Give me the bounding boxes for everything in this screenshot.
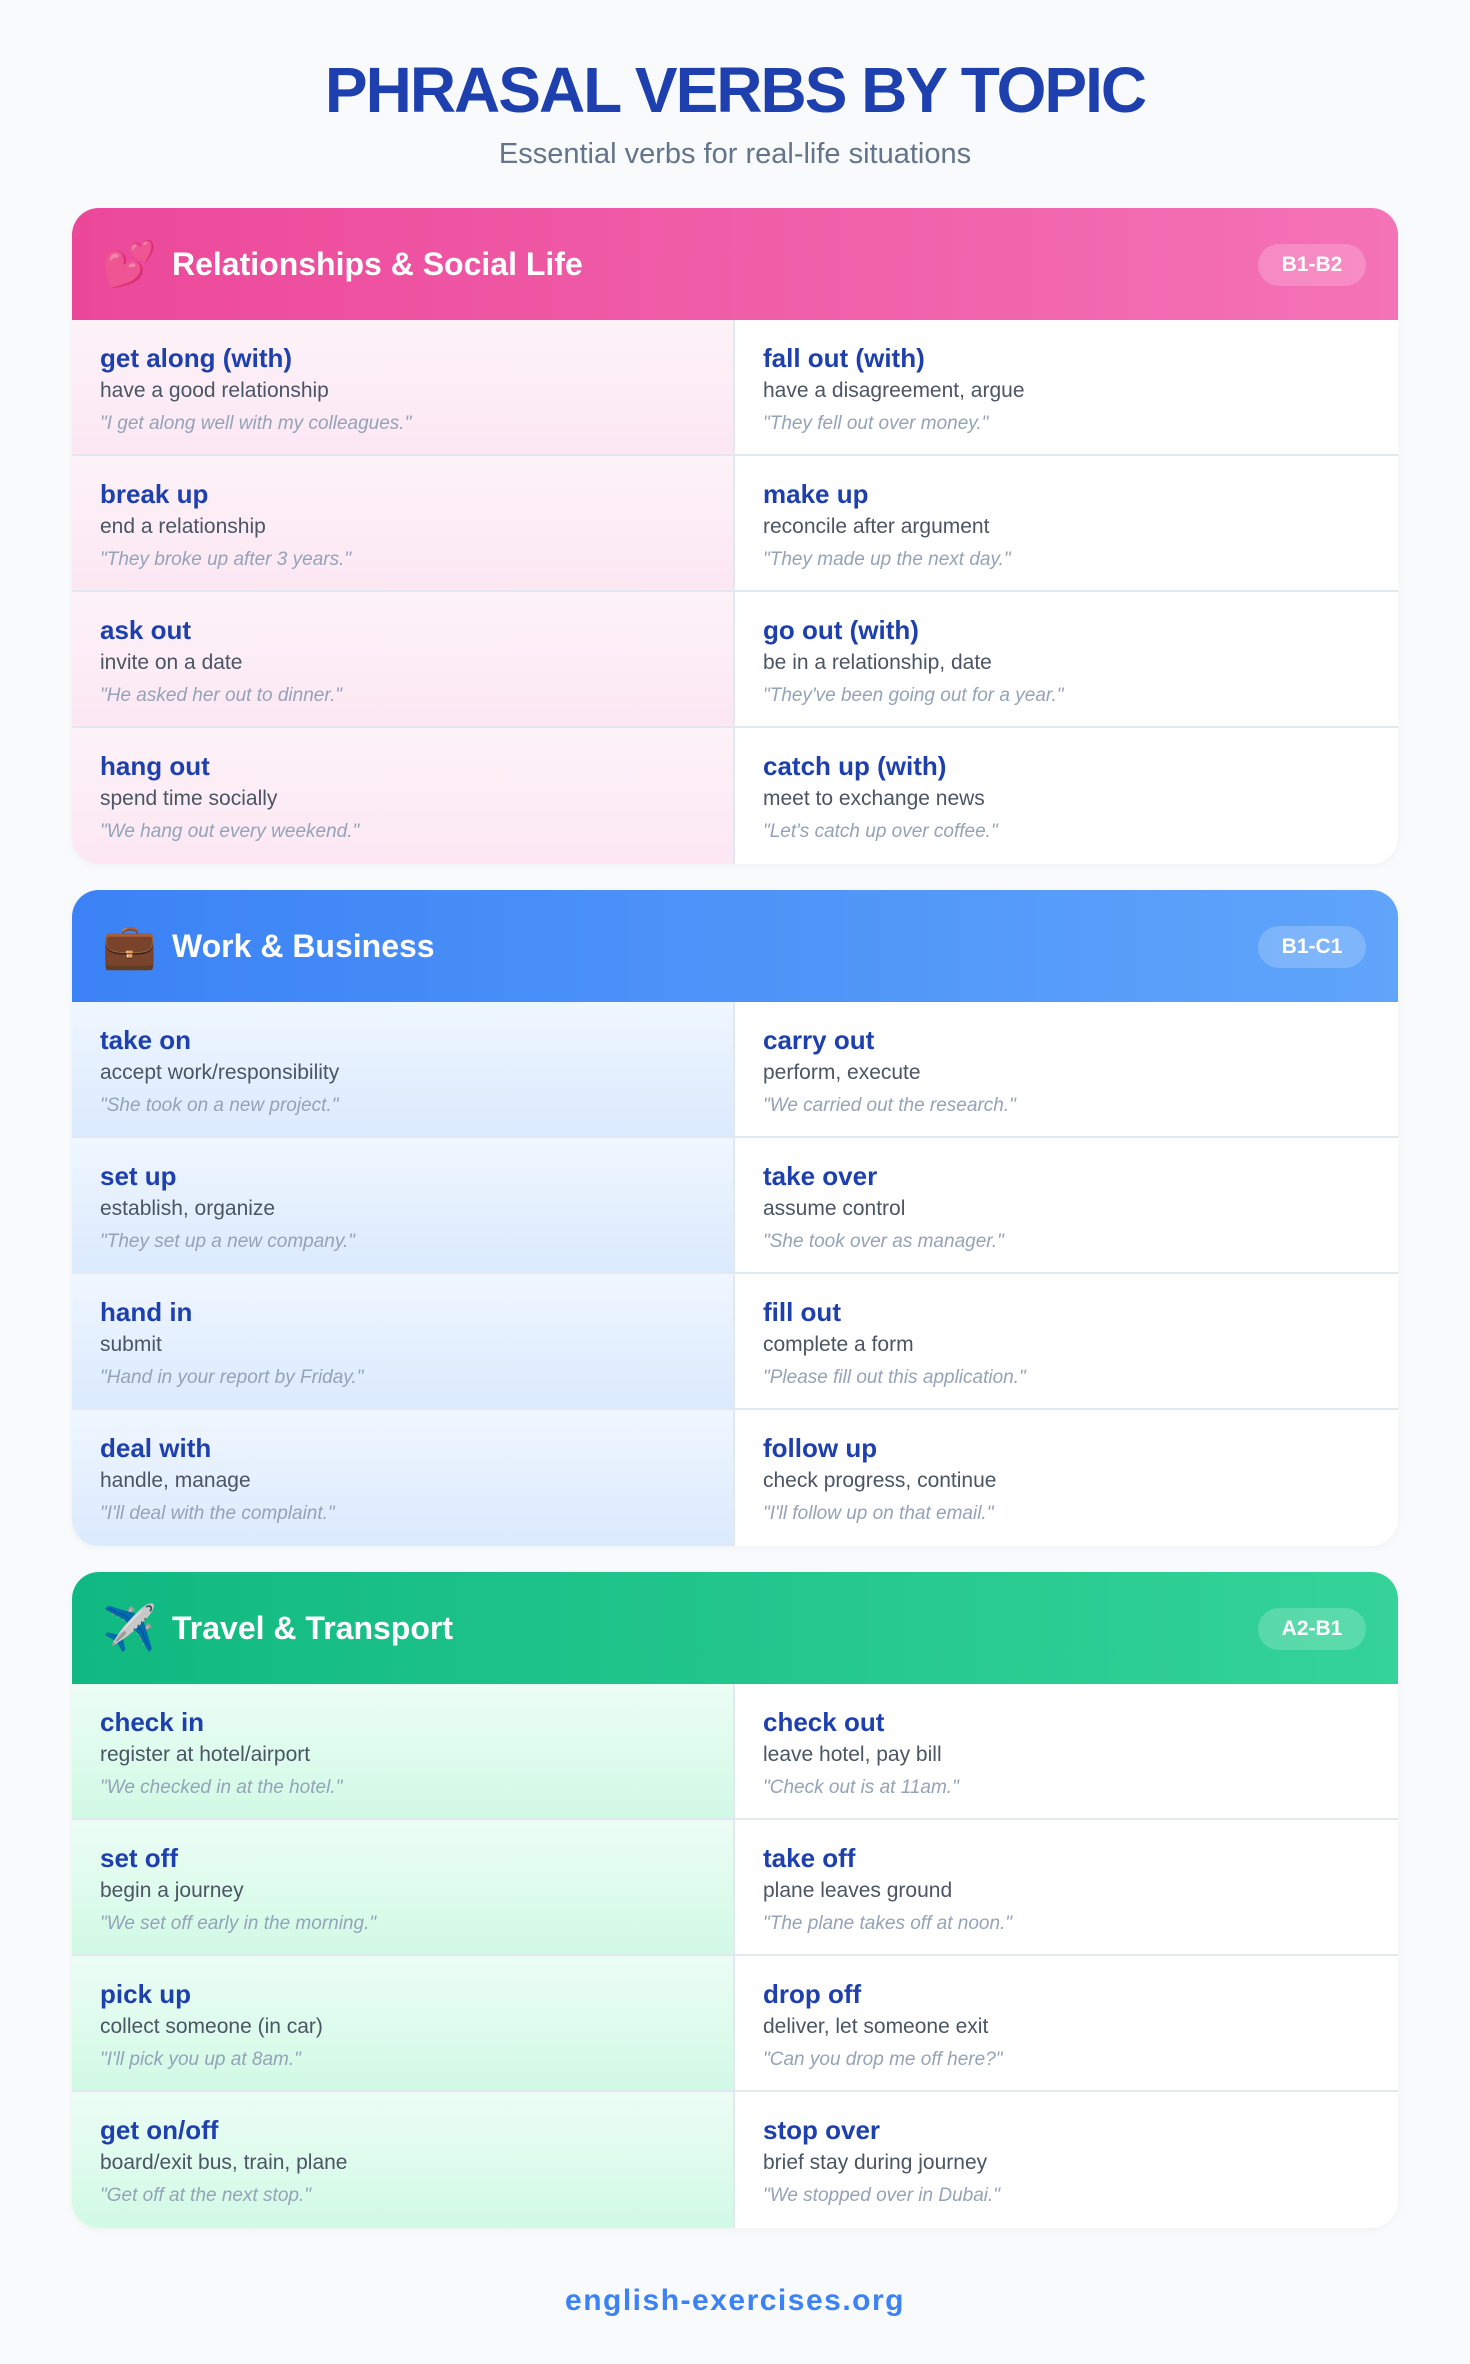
verb grid: travel: register at hotel/airport	[100, 1743, 310, 1766]
verb grid: relationships: fall out (with)	[763, 343, 925, 373]
footer: english-exercises.org	[565, 2284, 905, 2317]
subtitle: Essential verbs for real-life situations	[499, 138, 971, 170]
verb grid: relationships: be in a relationship, date	[763, 651, 992, 674]
verb grid: work: accept work/responsibility	[100, 1061, 339, 1084]
panel header: relationships: 💕	[102, 238, 157, 290]
verb grid: work: take over	[763, 1161, 877, 1191]
verb grid: relationships: spend time socially	[100, 787, 277, 810]
panel: travel	[72, 1572, 1398, 2228]
panel header: work	[72, 890, 1398, 1002]
verb grid: travel: "Get off at the next stop."	[100, 2185, 311, 2206]
verb grid: work: deal with	[100, 1433, 211, 1463]
verb grid: relationships: "They've been going out for a year."	[763, 685, 1064, 706]
verb grid: travel: "We checked in at the hotel."	[100, 1777, 342, 1798]
panel header: work: Work & Business	[172, 928, 435, 964]
verb grid: work: submit	[100, 1333, 162, 1356]
verb grid: travel: collect someone (in car)	[100, 2015, 323, 2038]
panel header: work: 💼	[102, 920, 157, 972]
verb grid: relationships: end a relationship	[100, 515, 266, 538]
verb grid: work: check progress, continue	[763, 1469, 996, 1492]
verb grid: relationships: "We hang out every weekend."	[100, 821, 359, 842]
verb grid: travel: brief stay during journey	[763, 2151, 987, 2174]
verb grid: relationships: "They made up the next day."	[763, 549, 1011, 570]
panel header: relationships	[72, 208, 1398, 320]
verb grid: travel: leave hotel, pay bill	[763, 1743, 942, 1766]
verb grid: travel: "Check out is at 11am."	[763, 1777, 959, 1798]
verb grid: work: fill out	[763, 1297, 841, 1327]
verb grid: travel: pick up	[100, 1979, 191, 2009]
panel header: travel: Travel & Transport	[172, 1610, 453, 1646]
verb grid: travel: deliver, let someone exit	[763, 2015, 988, 2038]
panel header: relationships: Relationships & Social Life	[172, 246, 583, 282]
verb grid: relationships: "I get along well with my colleagues."	[100, 413, 411, 434]
verb grid: travel: board/exit bus, train, plane	[100, 2151, 348, 2174]
verb grid: travel: check out	[763, 1707, 884, 1737]
verb grid: travel: stop over	[763, 2115, 880, 2145]
verb grid: relationships: have a disagreement, argue	[763, 379, 1025, 402]
verb grid: work: "She took over as manager."	[763, 1231, 1004, 1252]
panel header: travel	[72, 1572, 1398, 1684]
verb grid: relationships	[72, 320, 1398, 864]
verb grid: travel: plane leaves ground	[763, 1879, 952, 1902]
verb grid: work: take on	[100, 1025, 191, 1055]
verb grid: travel	[72, 1684, 1398, 2228]
verb grid: work	[72, 1002, 1398, 1546]
verb grid: work: "We carried out the research."	[763, 1095, 1016, 1116]
verb grid: work: perform, execute	[763, 1061, 921, 1084]
verb grid: work: "I'll follow up on that email."	[763, 1503, 993, 1524]
verb grid: travel: take off	[763, 1843, 855, 1873]
verb grid: relationships: invite on a date	[100, 651, 242, 674]
verb grid: travel: "Can you drop me off here?"	[763, 2049, 1003, 2070]
verb grid: work: complete a form	[763, 1333, 914, 1356]
verb grid: work: "I'll deal with the complaint."	[100, 1503, 335, 1524]
verb grid: travel: drop off	[763, 1979, 861, 2009]
verb grid: relationships: get along (with)	[100, 343, 292, 373]
verb grid: work: hand in	[100, 1297, 192, 1327]
title: PHRASAL VERBS BY TOPIC	[325, 54, 1145, 126]
verb grid: work: "They set up a new company."	[100, 1231, 355, 1252]
panel header: relationships: B1-B2	[1282, 253, 1342, 276]
verb grid: travel: get on/off	[100, 2115, 218, 2145]
verb grid: travel: "I'll pick you up at 8am."	[100, 2049, 301, 2070]
verb grid: relationships: make up	[763, 479, 868, 509]
verb grid: travel: "We set off early in the morning."	[100, 1913, 376, 1934]
verb grid: travel: set off	[100, 1843, 178, 1873]
verb grid: work: establish, organize	[100, 1197, 275, 1220]
verb grid: work: set up	[100, 1161, 177, 1191]
verb grid: relationships: catch up (with)	[763, 751, 946, 781]
verb grid: work: "Please fill out this application."	[763, 1367, 1026, 1388]
verb grid: relationships: ask out	[100, 615, 191, 645]
verb grid: work: "Hand in your report by Friday."	[100, 1367, 363, 1388]
verb grid: relationships: "They broke up after 3 years."	[100, 549, 351, 570]
verb grid: travel: check in	[100, 1707, 204, 1737]
verb grid: relationships: reconcile after argument	[763, 515, 989, 538]
verb grid: work: carry out	[763, 1025, 874, 1055]
panel header: travel: A2-B1	[1282, 1617, 1342, 1640]
verb grid: relationships: "They fell out over money."	[763, 413, 988, 434]
verb grid: relationships: "He asked her out to dinner."	[100, 685, 342, 706]
verb grid: relationships: break up	[100, 479, 208, 509]
verb grid: travel: "The plane takes off at noon."	[763, 1913, 1012, 1934]
verb grid: work: handle, manage	[100, 1469, 251, 1492]
verb grid: travel: begin a journey	[100, 1879, 244, 1902]
verb grid: relationships: meet to exchange news	[763, 787, 985, 810]
panel header: work: B1-C1	[1282, 935, 1342, 958]
panel: work	[72, 890, 1398, 1546]
verb grid: work: "She took on a new project."	[100, 1095, 338, 1116]
verb grid: relationships: hang out	[100, 751, 210, 781]
verb grid: travel: "We stopped over in Dubai."	[763, 2185, 1000, 2206]
panel header: travel: ✈️	[102, 1602, 157, 1654]
verb grid: work: follow up	[763, 1433, 877, 1463]
verb grid: relationships: "Let's catch up over coffee."	[763, 821, 998, 842]
verb grid: relationships: go out (with)	[763, 615, 919, 645]
verb grid: work: assume control	[763, 1197, 905, 1220]
verb grid: relationships: have a good relationship	[100, 379, 329, 402]
panel: relationships	[72, 208, 1398, 864]
